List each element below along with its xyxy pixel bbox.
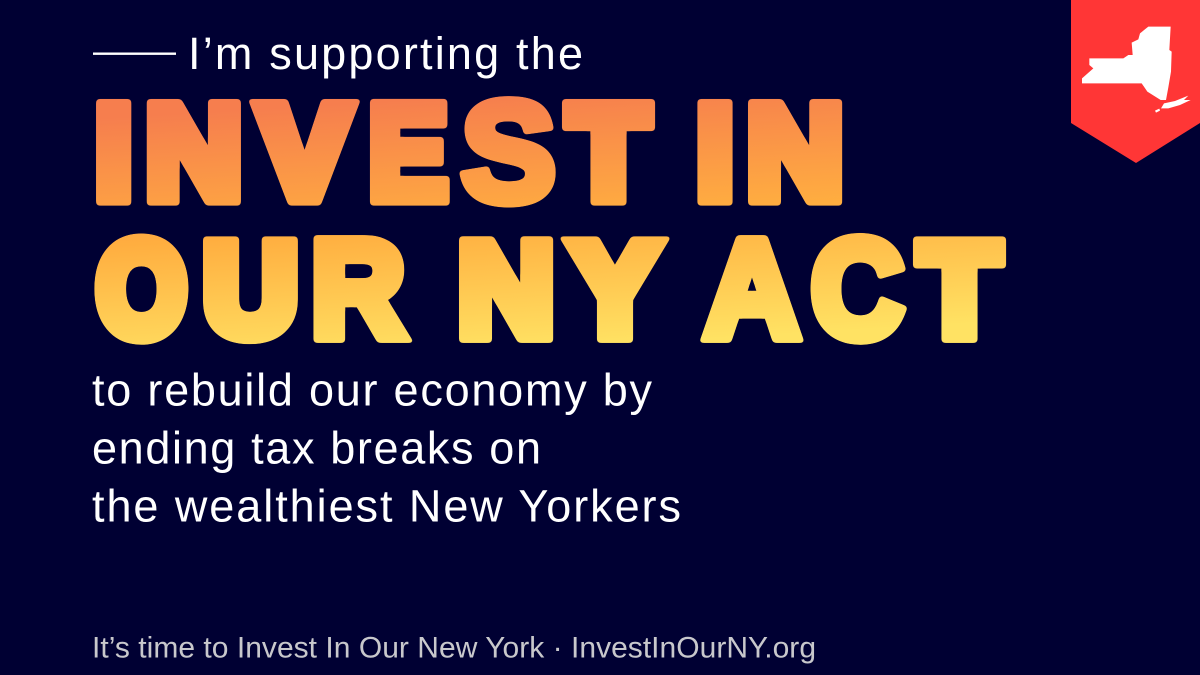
headline line 1: N: [747, 79, 843, 226]
headline line 1: I: [96, 81, 131, 225]
supporting text: the wealthiest New Yorkers: [92, 481, 681, 532]
headline line 2: U: [204, 218, 297, 362]
headline line 2: [97, 212, 999, 367]
headline line 1: V: [260, 81, 349, 225]
headline: [96, 73, 999, 367]
headline line 1: S: [461, 73, 556, 232]
supporting text: to rebuild our economy by: [92, 365, 652, 416]
headline line 2: Y: [572, 218, 658, 362]
headline line 2: C: [812, 213, 903, 367]
headline line 2: O: [97, 216, 186, 363]
headline line 2: T: [920, 218, 999, 362]
headline line 1: T: [569, 81, 648, 225]
supporting text: ending tax breaks on: [92, 423, 541, 474]
headline line 1: E: [369, 78, 448, 227]
headline line 1: N: [146, 79, 242, 226]
intro text: I’m supporting the: [188, 28, 583, 79]
headline line 2: R: [311, 212, 405, 365]
red banner: [1071, 0, 1200, 163]
headline line 2: A: [704, 212, 800, 366]
headline line 1: I: [698, 81, 732, 225]
supporting text: [92, 365, 681, 532]
icon: New York state map: [1082, 27, 1191, 113]
headline line 1: [96, 73, 843, 232]
intro rule: [93, 52, 176, 55]
badge: New York state: [1071, 0, 1200, 163]
headline line 2: N: [458, 216, 554, 363]
footer text: It’s time to Invest In Our New York · InvestInOurNY.org: [92, 632, 816, 665]
